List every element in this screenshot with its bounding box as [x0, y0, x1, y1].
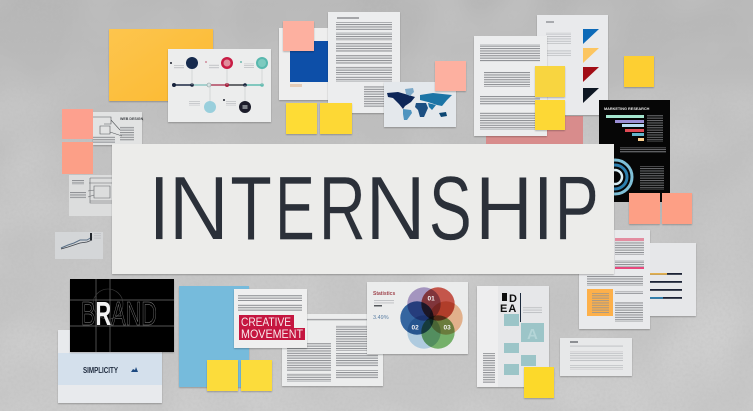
sticky note: salmon right 1 — [629, 193, 660, 224]
title: E — [275, 158, 315, 260]
teal blocks: A — [527, 326, 538, 343]
panel: simplicity card — [58, 330, 162, 403]
panel: brand card — [70, 279, 174, 352]
panel: text document top right — [474, 36, 547, 136]
sticky note: salmon lower left — [62, 142, 93, 174]
red headline — [239, 315, 305, 341]
red headline: MOVEMENT — [241, 329, 303, 341]
venn numbers: 02 — [412, 324, 419, 332]
panel: light blue sheet — [179, 286, 249, 387]
sticky note: pink centre — [435, 61, 466, 91]
panel: small note sheet — [560, 338, 632, 376]
title: I — [148, 158, 170, 259]
panel: text document top centre — [328, 12, 400, 113]
title: H — [475, 158, 533, 260]
panel: sketch wireframe middle — [69, 175, 114, 216]
sticky note: salmon upper left — [62, 109, 93, 139]
panel: simplicity card: SIMPLICITY — [83, 366, 119, 375]
panel: blue square card — [279, 28, 331, 100]
statistics text: 3.49% — [373, 315, 389, 321]
panel: colour triangles sheet — [537, 15, 608, 115]
sticky note: pink top — [283, 21, 314, 51]
panel: idea sheet — [477, 286, 549, 387]
sticky note: yellow lower stack — [535, 100, 565, 130]
red headline: CREATIVE — [241, 317, 291, 329]
bar chart — [606, 115, 663, 142]
statistics text — [373, 291, 395, 321]
panel: small line chart — [55, 232, 103, 259]
panel: statistics venn card — [367, 282, 468, 354]
idea title — [500, 293, 517, 315]
panel: rose sheet — [486, 116, 583, 146]
sticky note: amber right — [624, 56, 654, 87]
map continents — [387, 88, 452, 120]
venn numbers — [412, 296, 451, 332]
venn numbers: 03 — [444, 324, 451, 332]
donut chart — [598, 160, 632, 194]
panel: text document bottom centre — [282, 314, 383, 386]
idea title: D — [509, 293, 517, 305]
idea title: EA — [500, 303, 517, 315]
sticky note: yellow idea — [524, 367, 554, 398]
title: N — [168, 157, 229, 259]
title — [148, 157, 599, 260]
title: I — [532, 158, 554, 259]
panel: timeline infographic — [168, 49, 271, 122]
title: N — [365, 157, 426, 259]
panel: sketch wireframe top: WEB DESIGN — [120, 117, 144, 121]
sticky note: orange handwritten — [587, 289, 613, 316]
panel: right text document with highlights — [579, 230, 696, 329]
timeline line — [172, 69, 264, 101]
title: T — [230, 158, 272, 260]
title: P — [554, 158, 599, 259]
venn numbers: 01 — [428, 296, 435, 302]
panel: world map card — [384, 82, 456, 127]
panel: creative movement card — [234, 289, 307, 348]
panel: dark bar chart sheet — [598, 100, 670, 202]
venn diagram — [400, 287, 463, 349]
title: R — [319, 157, 366, 259]
triangle swatches — [583, 29, 599, 103]
sticky note: salmon right 2 — [662, 193, 692, 224]
main banner — [112, 144, 614, 274]
title: S — [429, 158, 472, 259]
sticky note: yellow upper stack — [535, 66, 565, 97]
panel: sketch wireframe top — [93, 112, 144, 145]
striped chart lines — [650, 273, 682, 299]
sticky note: yellow left — [286, 103, 317, 134]
sticky note: yellow bottom right — [241, 360, 272, 391]
sticky note: yellow right — [320, 103, 352, 134]
sticky note: yellow bottom left — [207, 360, 238, 391]
timeline icons — [170, 57, 268, 113]
brand word: BRAND — [81, 295, 157, 332]
chart title: MARKETING RESEARCH — [604, 107, 650, 111]
sticky note: large amber — [109, 29, 213, 101]
statistics text: Statistics — [373, 291, 395, 297]
